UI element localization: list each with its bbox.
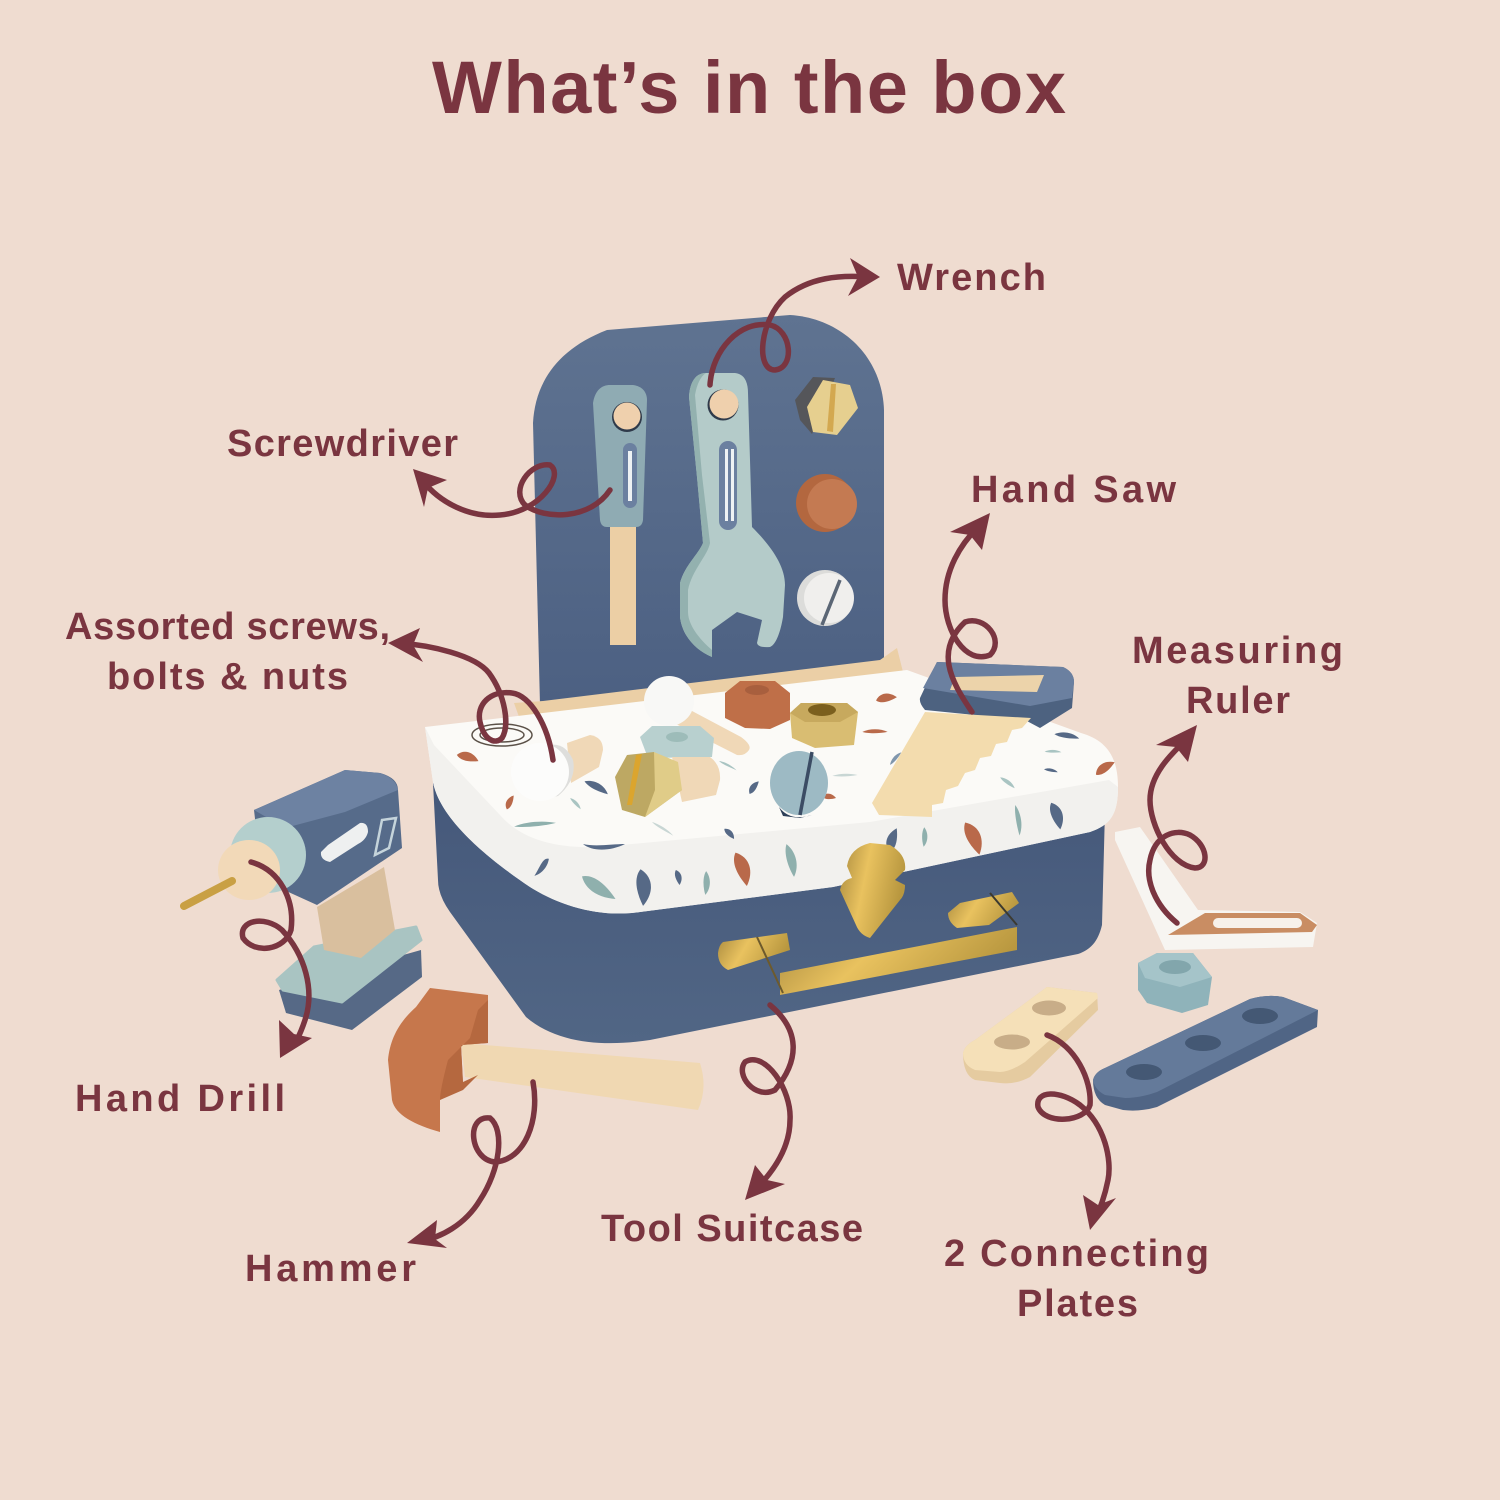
drill base bbox=[279, 950, 422, 1030]
wrench bbox=[680, 373, 785, 657]
label: measuring ruler bbox=[1132, 630, 1343, 923]
label: hammer: Hammer bbox=[245, 1248, 416, 1290]
white screw bbox=[797, 570, 853, 626]
latch bbox=[840, 843, 905, 938]
label: assorted: bolts & nuts bbox=[107, 656, 348, 698]
peg bolts on panel bbox=[795, 377, 858, 626]
gold bolt shaft bbox=[672, 757, 720, 802]
blue screw bbox=[770, 751, 828, 815]
label: connecting plates bbox=[944, 1035, 1209, 1325]
saw handle bbox=[920, 662, 1074, 728]
screw white left bbox=[567, 735, 603, 783]
hand saw bbox=[872, 662, 1074, 817]
gold bolt head bbox=[615, 752, 682, 817]
label: tool suitcase bbox=[601, 1005, 863, 1250]
label: tool suitcase: Tool Suitcase bbox=[601, 1208, 863, 1250]
gold nut bbox=[790, 703, 858, 748]
label: wrench: Wrench bbox=[897, 257, 1046, 299]
assorted screws and nuts bbox=[511, 676, 858, 818]
loose nut bbox=[1138, 953, 1212, 1013]
label: hand drill: Hand Drill bbox=[75, 1078, 285, 1120]
light blue nut bbox=[640, 726, 714, 758]
label: wrench bbox=[710, 257, 1046, 385]
hammer bbox=[388, 988, 704, 1132]
label: measuring ruler: Ruler bbox=[1186, 680, 1290, 722]
suitcase lid bbox=[425, 670, 1118, 914]
title: What’s in the box bbox=[432, 46, 1066, 129]
wood plate bbox=[963, 987, 1098, 1083]
orange peg bbox=[796, 474, 854, 532]
label: assorted: Assorted screws, bbox=[65, 606, 390, 648]
label: measuring ruler: Measuring bbox=[1132, 630, 1343, 672]
gold bolt bbox=[795, 377, 835, 434]
drill slot bbox=[321, 823, 368, 862]
hand drill bbox=[184, 770, 422, 1030]
drill vents bbox=[375, 818, 396, 855]
drill grip bbox=[317, 867, 395, 958]
drill body bbox=[254, 770, 402, 905]
saw blade bbox=[872, 712, 1031, 817]
screw white top bbox=[672, 703, 750, 755]
maker stamp bbox=[472, 724, 532, 746]
label: screwdriver: Screwdriver bbox=[227, 423, 458, 465]
label: connecting plates: 2 Connecting bbox=[944, 1233, 1209, 1275]
measuring ruler bbox=[1115, 827, 1317, 950]
screwdriver bbox=[593, 385, 647, 645]
label: connecting plates: Plates bbox=[1017, 1283, 1138, 1325]
back panel bbox=[533, 315, 884, 705]
drill bit bbox=[184, 881, 232, 906]
label: screwdriver bbox=[227, 423, 610, 515]
blue plate bbox=[1093, 996, 1318, 1111]
lid terrazzo pattern bbox=[456, 691, 1116, 906]
toy workbench suitcase bbox=[425, 315, 1118, 1043]
drill chuck bbox=[230, 817, 306, 893]
label: assorted bbox=[65, 606, 553, 760]
orange nut bbox=[725, 681, 790, 729]
label: hand saw: Hand Saw bbox=[971, 469, 1176, 511]
suitcase body bbox=[433, 783, 1105, 1043]
label: hand drill bbox=[75, 862, 312, 1120]
label: hammer bbox=[245, 1082, 535, 1290]
lid rim shading bbox=[425, 727, 1118, 914]
handle bbox=[718, 892, 1019, 995]
connecting plates bbox=[963, 987, 1318, 1111]
label: hand saw bbox=[945, 469, 1176, 712]
wood strip bbox=[514, 648, 903, 728]
